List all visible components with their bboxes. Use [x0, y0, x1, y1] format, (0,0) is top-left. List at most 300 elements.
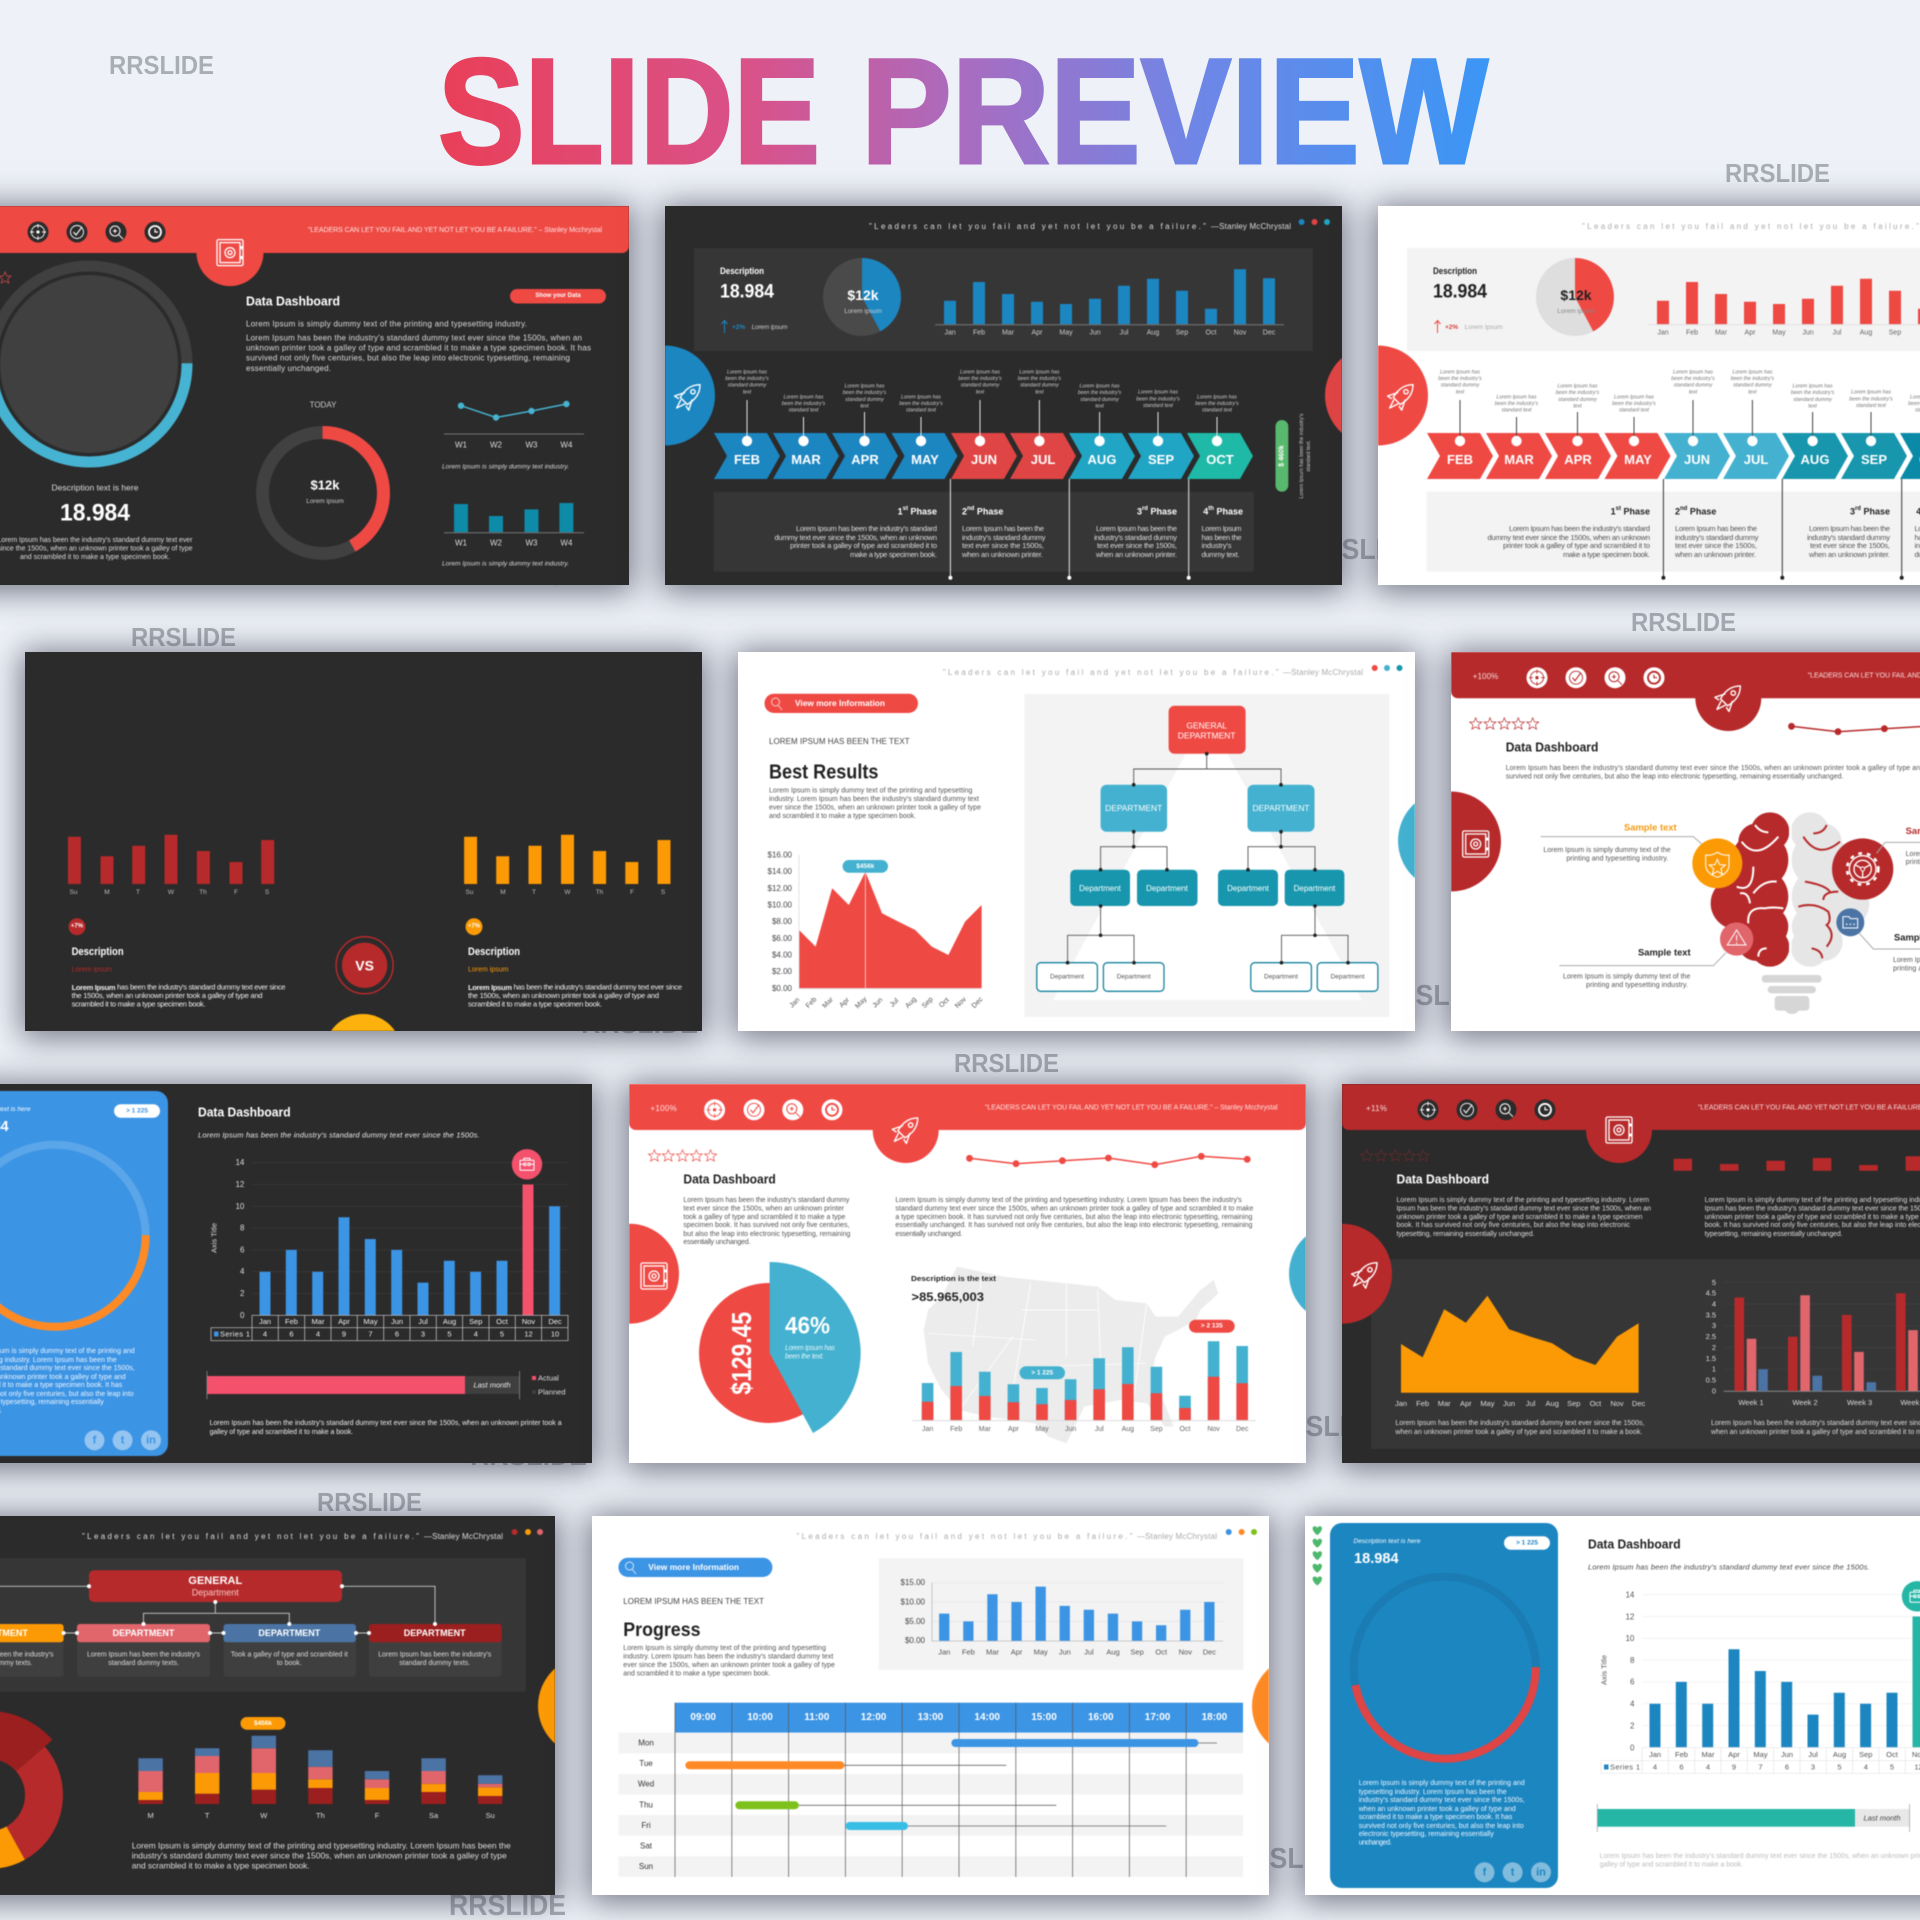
line chart — [442, 401, 584, 470]
hearts — [1313, 1526, 1322, 1586]
timeline captions: been the industry's — [1438, 376, 1482, 382]
card paragraph — [0, 1348, 135, 1414]
area chart: $456k — [856, 863, 875, 870]
bar chart with table: 5 — [1890, 1762, 1894, 1772]
donut chart: TODAY — [310, 400, 337, 410]
phase text: st — [903, 506, 908, 512]
card stat — [0, 1106, 31, 1135]
timeline captions: been the industry's — [958, 376, 1002, 382]
phase text — [774, 506, 1243, 559]
header band — [1451, 652, 1920, 698]
timeline captions: standard dummy — [1558, 397, 1597, 403]
header band — [0, 206, 629, 253]
stacked bar chart: Su — [486, 1811, 495, 1820]
quote: "Leaders can let you fail and yet not let you be a failure." — [1582, 222, 1919, 231]
department cards: Lorem Ipsum has been the industry's — [87, 1652, 200, 1658]
timeline chevrons: SEP — [1148, 452, 1174, 467]
paragraph: industry's standard dummy text ever since the 1500s, when an unknown printer took a galley of type — [132, 1851, 507, 1861]
header icons — [704, 1099, 842, 1120]
bar chart: Jul — [1120, 330, 1129, 336]
gantt table: 09:00 — [690, 1712, 716, 1723]
subheading: Lorem Ipsum has been the industry's standard dummy text ever since the 1500s. — [1588, 1562, 1870, 1572]
area chart: Jan — [1395, 1399, 1407, 1408]
blue card — [0, 1091, 168, 1456]
stat: 18.984 — [1433, 282, 1487, 302]
header band — [629, 1084, 1306, 1130]
left paragraph: but also the leap into electronic typesetting, remaining — [683, 1231, 850, 1238]
timeline captions: Lorem Ipsum has — [1080, 384, 1120, 390]
timeline captions: Lorem Ipsum has — [1138, 390, 1178, 396]
watermark: RRSLIDE — [1631, 607, 1736, 637]
bar chart with table: 3 — [1811, 1762, 1815, 1772]
stacked bar chart: F — [375, 1811, 380, 1820]
timeline captions: text — [1689, 389, 1698, 395]
legend: Planned — [538, 1388, 566, 1396]
paragraph: and scrambled it to make a type specimen book. — [769, 813, 916, 820]
paragraph: ever since the 1500s, when an unknown printer took a galley of type — [769, 804, 981, 812]
paragraph: ever since the 1500s, when an unknown printer took a galley of type — [623, 1662, 835, 1669]
org chart nodes: Department — [1079, 884, 1122, 893]
grouped bar chart: 1 — [1712, 1365, 1716, 1374]
timeline captions: been the industry's — [899, 401, 943, 407]
phase text: Lorem Ipsum has been the industry's standard — [796, 524, 937, 533]
star rating — [0, 272, 11, 283]
timeline chevrons — [1427, 400, 1920, 479]
social icons: t — [1511, 1866, 1515, 1878]
timeline captions: standard dummy — [1080, 397, 1119, 403]
big ring gauge — [0, 266, 187, 462]
grouped bar chart: Week 3 — [1847, 1398, 1872, 1407]
timeline captions: standard dummy — [1441, 383, 1480, 389]
bar chart: Aug — [1860, 330, 1872, 336]
general node — [89, 1570, 342, 1602]
area chart: Apr — [1460, 1399, 1472, 1408]
gantt table — [618, 1703, 1243, 1877]
timeline captions: been the industry's — [1849, 396, 1893, 402]
timeline chevrons: MAR — [1504, 452, 1534, 467]
bar chart with table: 10 — [1625, 1634, 1635, 1643]
heading: Data Dashboard — [198, 1106, 291, 1120]
grouped bar chart: 3.5 — [1706, 1310, 1716, 1319]
bar chart: Jun — [1802, 330, 1814, 336]
left description: +7% — [71, 924, 84, 930]
bar chart with table: 6 — [395, 1330, 399, 1339]
pie chart: been the text. — [785, 1354, 824, 1360]
phase text: nd — [1680, 506, 1688, 512]
timeline captions: text — [1573, 404, 1582, 410]
bar chart with table: 7 — [368, 1330, 373, 1339]
timeline chevrons: MAY — [911, 452, 939, 467]
timeline chevrons — [714, 400, 1253, 479]
bar chart: W3 — [526, 538, 538, 548]
bar chart with table: 5 — [1837, 1762, 1842, 1772]
bar chart with table: Sep — [469, 1317, 482, 1326]
timeline chevrons: MAY — [1624, 452, 1652, 467]
phase text: 1 — [898, 507, 903, 517]
phase text: Phase — [974, 507, 1003, 517]
right bar chart: S — [661, 889, 666, 896]
bar chart with table: 2 — [1630, 1721, 1635, 1730]
line chart: W3 — [526, 440, 538, 450]
bar chart: Feb — [973, 330, 985, 336]
progress bar: Last month — [473, 1380, 511, 1390]
bar chart with table: 10 — [235, 1202, 245, 1211]
panel: slide 11 progress gantt — [592, 1516, 1269, 1895]
gantt table: Thu — [639, 1800, 653, 1809]
card stat — [1354, 1538, 1421, 1567]
bar chart with table: 4 — [316, 1330, 320, 1339]
heading: Data Dashboard — [683, 1172, 776, 1186]
footnote — [210, 1420, 562, 1436]
gantt table: Wed — [638, 1780, 654, 1789]
header icons — [1418, 1099, 1556, 1120]
social icons — [84, 1430, 161, 1450]
card paragraph: industry's standard dummy text ever since the 1500s, — [1359, 1797, 1525, 1804]
stacked bar chart — [138, 1736, 502, 1820]
phase text: Phase — [1687, 507, 1716, 517]
paragraph: Lorem Ipsum is simply dummy text of the printing and typesetting industry. Lorem Ipsum has been the — [132, 1841, 511, 1851]
line chart: Lorem Ipsum is simply dummy text industry. — [442, 464, 569, 470]
bar chart with table: 6 — [289, 1330, 294, 1339]
ring gauge — [1354, 1577, 1536, 1759]
phases panel — [1426, 492, 1920, 572]
grouped bar chart: 4.5 — [1706, 1289, 1716, 1298]
timeline captions: been the industry's — [1671, 376, 1715, 382]
column markers — [1674, 1156, 1920, 1171]
timeline chevrons: APR — [851, 452, 879, 467]
bar chart: Feb — [962, 1648, 975, 1656]
timeline captions: been the industry's — [1731, 376, 1774, 382]
bar chart with table: May — [363, 1317, 378, 1326]
area chart: Feb — [1416, 1399, 1429, 1408]
left paragraph: text ever since the 1500s, when an unknown printer — [683, 1206, 845, 1212]
bar chart with table: Mar — [1702, 1750, 1715, 1759]
star rating — [648, 1150, 717, 1161]
gantt table: Mon — [638, 1738, 654, 1748]
phase text: text ever since the 1500s, — [962, 541, 1044, 550]
panel: slide 2 timeline dark — [665, 206, 1342, 585]
description stat: since the 1500s, when an unknown printer took a galley of type — [0, 546, 193, 552]
bar chart: May — [1034, 1648, 1048, 1656]
brain illustration: printing and typesetting industry. — [1586, 982, 1688, 989]
side circles — [579, 1224, 1389, 1324]
timeline captions: text — [1035, 389, 1044, 395]
timeline captions: standard text — [1856, 403, 1887, 409]
progress bar: Last month — [1863, 1813, 1901, 1822]
bar chart: Feb — [1686, 330, 1698, 336]
footnote: galley of type and scrambled it to make a book. — [1600, 1862, 1743, 1868]
left description: Description — [72, 946, 124, 958]
map — [924, 1267, 1218, 1443]
description stat: 18.984 — [60, 500, 131, 526]
pie chart: $129.45 — [726, 1312, 757, 1395]
grouped bar chart: Week 2 — [1792, 1398, 1818, 1407]
progress bar — [1597, 1804, 1910, 1832]
area chart: $12.00 — [768, 884, 793, 893]
side circles — [615, 346, 1425, 446]
brain illustration: printing and typesetting industry. — [1566, 855, 1668, 862]
timeline captions: standard dummy — [728, 383, 767, 389]
bar chart: Sep — [1130, 1648, 1144, 1656]
bar chart: Jan — [938, 1648, 950, 1656]
timeline captions: text — [1456, 389, 1465, 395]
pie chart: 46% — [785, 1312, 830, 1340]
bar chart with table: Jan — [1649, 1750, 1661, 1759]
bar chart with table — [1600, 1590, 1920, 1773]
bar chart with table: Aug — [1833, 1750, 1846, 1759]
bar chart: Oct — [1155, 1648, 1168, 1656]
bar chart: $15.00 — [901, 1578, 926, 1587]
panel: slide 7 dashboard dark blue — [0, 1084, 592, 1463]
growth label: +11% — [1366, 1104, 1387, 1113]
grouped bar chart: 3 — [1712, 1321, 1716, 1330]
grouped bar chart — [1706, 1278, 1920, 1407]
bar chart with table: Jul — [418, 1317, 428, 1326]
star rating — [1470, 718, 1539, 729]
right paragraph: typesetting, remaining essentially unchanged. — [1705, 1231, 1843, 1238]
line chart — [1788, 723, 1920, 735]
department cards: DEPARTMENT — [113, 1628, 175, 1638]
area chart caption: when an unknown printer took a galley of type and scrambled it to make a book. — [1394, 1429, 1642, 1436]
dots — [1226, 1529, 1257, 1535]
left paragraph — [1396, 1197, 1651, 1238]
phase text: 2 — [1675, 507, 1680, 517]
bar chart with table: 4 — [1653, 1762, 1657, 1772]
card paragraph: when an unknown printer took a galley of type and — [1358, 1806, 1516, 1813]
bar chart with table: May — [1753, 1750, 1768, 1759]
timeline captions: Lorem Ipsum has — [1673, 369, 1713, 375]
area chart: $0.00 — [772, 984, 793, 993]
org chart nodes: Department — [1331, 974, 1365, 980]
growth label: +100% — [1473, 672, 1498, 681]
right description — [466, 918, 682, 1008]
paragraph — [1506, 765, 1920, 780]
footnote: galley of type and scrambled it to make a book. — [210, 1429, 353, 1436]
phase text: dummy text ever since the 1500s, when an unknown — [774, 533, 937, 542]
bar chart: W1 — [455, 538, 468, 548]
timeline captions: Lorem Ipsum has — [1793, 384, 1833, 390]
area chart: Oct — [1590, 1399, 1602, 1408]
timeline captions: been the industry's — [725, 376, 769, 382]
area chart: Dec — [971, 996, 985, 1010]
department cards: DEPARTMENT — [404, 1628, 466, 1638]
dots — [1299, 219, 1330, 225]
card stat: 18.984 — [1354, 1550, 1399, 1567]
phase text: when an unknown printer. — [961, 550, 1043, 559]
right description: Lorem ipsum — [468, 966, 509, 974]
bar chart: Jun — [1089, 330, 1101, 336]
paragraph: survived not only five centuries, but also the leap into electronic typesetting, remaining — [246, 354, 570, 362]
bar chart — [901, 1578, 1223, 1656]
area chart: Sep — [1567, 1399, 1580, 1408]
stat: Lorem Ipsum — [1465, 324, 1503, 331]
phase text: st — [1616, 506, 1621, 512]
right bar chart: Th — [596, 889, 604, 896]
phase text: industry's standard dummy — [962, 533, 1046, 542]
timeline captions: Lorem Ipsum has — [960, 369, 1000, 375]
description stat: Description text is here — [52, 483, 139, 493]
watermark: RRSLIDE — [954, 1048, 1059, 1078]
timeline chevrons: AUG — [1801, 452, 1829, 467]
bar chart with table: Series 1 — [220, 1330, 250, 1339]
left circle — [1292, 1224, 1392, 1324]
growth label: +100% — [650, 1104, 677, 1113]
phase text: when an unknown printer. — [1095, 550, 1177, 559]
left bar chart: W — [168, 889, 175, 896]
timeline captions: Lorem Ipsum has — [1557, 384, 1598, 390]
right circle — [538, 1656, 638, 1756]
timeline captions: text — [743, 389, 752, 395]
org chart nodes: Department — [1050, 974, 1084, 980]
search pill: View more Information — [648, 1563, 739, 1572]
watermark behind slide 5: RRSLIDE — [1377, 980, 1494, 1012]
bar chart: Jul — [1084, 1648, 1094, 1656]
phase text: Phase — [1214, 507, 1243, 517]
star rating — [1361, 1150, 1429, 1161]
watermark behind slide 11: RRSLIDE — [1231, 1843, 1348, 1875]
department cards — [0, 1584, 502, 1677]
bar chart: Nov — [1234, 330, 1247, 336]
left paragraph — [683, 1197, 850, 1246]
bar chart: $5.00 — [905, 1617, 926, 1626]
phase text: Lorem Ipsum has been the — [962, 524, 1044, 533]
stacked bar chart: Feb — [950, 1426, 962, 1433]
org chart nodes: Department — [1264, 974, 1298, 980]
grouped bar chart: Week 1 — [1738, 1398, 1764, 1407]
left bar chart: Su — [70, 889, 78, 896]
stat: Lorem Ipsum — [752, 324, 788, 331]
area chart: $8.00 — [772, 917, 793, 926]
stat: +2% — [1445, 324, 1458, 331]
gantt table: Sun — [639, 1862, 653, 1871]
stacked bar chart: Oct — [1180, 1426, 1190, 1433]
description stat: Lorem Ipsum has been the industry's standard dummy text ever — [0, 537, 193, 544]
bar chart: W4 — [560, 538, 573, 548]
pie — [1536, 258, 1614, 336]
bar chart: Apr — [1032, 330, 1043, 336]
stacked bar chart — [912, 1341, 1256, 1433]
bar chart with table: Oct — [496, 1317, 509, 1326]
bar chart with table: 12 — [235, 1180, 245, 1189]
icon: briefcase — [512, 1149, 542, 1180]
pie: $12k — [847, 287, 879, 303]
paragraph: unknown printer took a galley of type and scrambled it to make a type specimen book. It has — [246, 344, 591, 352]
bar chart: Dec — [1203, 1648, 1216, 1656]
left description: Lorem ipsum — [72, 966, 112, 974]
timeline chevrons: FEB — [1447, 452, 1473, 467]
pie: Lorem ipsum — [844, 308, 882, 315]
bar chart with table: Aug — [443, 1317, 456, 1326]
brain illustration: Sample text — [1638, 948, 1691, 958]
bar chart with table: 4 — [1706, 1762, 1710, 1772]
phase text: printer took a galley of type and scrambled it to — [790, 541, 937, 550]
bar chart: May — [1059, 330, 1073, 336]
bar chart with table: 8 — [1630, 1656, 1635, 1665]
org chart nodes: Department — [1294, 884, 1336, 893]
paragraph: essentially unchanged. — [246, 364, 331, 373]
stacked bar chart: W — [260, 1811, 268, 1820]
dots — [512, 1529, 543, 1535]
left paragraph: book. It has survived not only five centuries, but also the leap into electronic — [1396, 1222, 1630, 1229]
area chart: Apr — [838, 996, 852, 1009]
org chart nodes: Department — [1117, 974, 1151, 980]
timeline captions: Lorem Ipsum has — [1851, 390, 1891, 396]
header icons — [28, 222, 166, 242]
right paragraph: Lorem Ipsum is simply dummy text of the printing and typesetting industry. Lorem Ipsum has been the industry's — [895, 1197, 1242, 1204]
paragraph: industry. Lorem Ipsum has been the industry's standard dummy text — [623, 1654, 833, 1660]
department cards: Took a galley of type and scrambled it — [231, 1652, 348, 1658]
paragraph: Lorem Ipsum is simply dummy text of the printing and typesetting — [623, 1645, 826, 1652]
bar chart with table — [210, 1158, 568, 1341]
stacked bar chart: May — [1035, 1426, 1049, 1433]
grouped bar chart: 0 — [1712, 1386, 1716, 1396]
bar chart: Aug — [1106, 1648, 1120, 1656]
value pill — [1504, 1536, 1550, 1550]
phase text: 3 — [1137, 507, 1142, 517]
watermark behind slide 1: RRSLIDE — [508, 560, 625, 592]
timeline captions: standard text — [788, 408, 819, 414]
timeline captions: standard dummy — [1733, 383, 1772, 389]
paragraph: and scrambled it to make a type specimen book. — [132, 1861, 310, 1871]
tooltip — [240, 1717, 286, 1730]
donut chart: $12k — [311, 478, 340, 492]
footnote: Lorem Ipsum has been the industry's standard dummy text ever since the 1500s, when an unknown printer took a — [210, 1420, 562, 1427]
header icons — [1526, 667, 1664, 688]
map stat: Description is the text — [911, 1274, 997, 1283]
green value pill: standard text. — [1306, 440, 1312, 472]
watermark behind slide 4: RRSLIDE — [581, 1008, 698, 1040]
area chart: $16.00 — [768, 850, 793, 860]
bar chart: W2 — [490, 538, 503, 548]
bar chart: Apr — [1745, 330, 1756, 336]
bar chart with table: 5 — [500, 1330, 504, 1339]
phase text: rd — [1142, 506, 1148, 512]
bar chart with table: Jan — [259, 1317, 271, 1326]
org connectors — [0, 1586, 435, 1633]
area chart: May — [854, 995, 869, 1010]
area chart: Mar — [1438, 1399, 1451, 1408]
stacked bar chart: Dec — [1236, 1426, 1249, 1433]
org chart nodes: GENERAL — [1186, 720, 1227, 730]
bar chart with table: 14 — [235, 1158, 245, 1167]
phase text: dummy text ever since the 1500s, when an unknown — [1488, 533, 1650, 542]
bar chart: Aug — [1147, 330, 1159, 336]
grouped bar chart: 4 — [1712, 1300, 1716, 1308]
gantt table: 17:00 — [1145, 1712, 1171, 1723]
bar chart with table: Series 1 — [1610, 1762, 1640, 1772]
bar chart — [935, 269, 1284, 336]
org chart panel — [1024, 694, 1389, 1017]
bar chart with table: Axis Title — [210, 1223, 218, 1253]
stacked bar chart: M — [147, 1811, 154, 1820]
area chart caption: Lorem Ipsum has been the industry's standard dummy text ever since the 1500s, — [1395, 1420, 1644, 1427]
bar chart with table: 2 — [240, 1289, 245, 1298]
timeline captions: standard dummy — [961, 383, 1000, 389]
bar chart with table: 0 — [1630, 1744, 1635, 1752]
heading: Data Dashboard — [1506, 740, 1598, 754]
grouped bar chart: 5 — [1712, 1278, 1716, 1287]
org chart nodes: DEPARTMENT — [1252, 804, 1310, 813]
social icons: t — [121, 1434, 125, 1446]
timeline captions: been the industry's — [1078, 390, 1122, 396]
social icons: f — [93, 1434, 97, 1446]
VS badge: VS — [355, 958, 374, 974]
left circle with rocket — [1328, 346, 1428, 446]
timeline captions: standard dummy — [1793, 397, 1832, 403]
bar chart: Apr — [1011, 1648, 1023, 1656]
tooltips: > 2 135 — [1201, 1323, 1223, 1330]
icon: briefcase — [1902, 1581, 1920, 1612]
